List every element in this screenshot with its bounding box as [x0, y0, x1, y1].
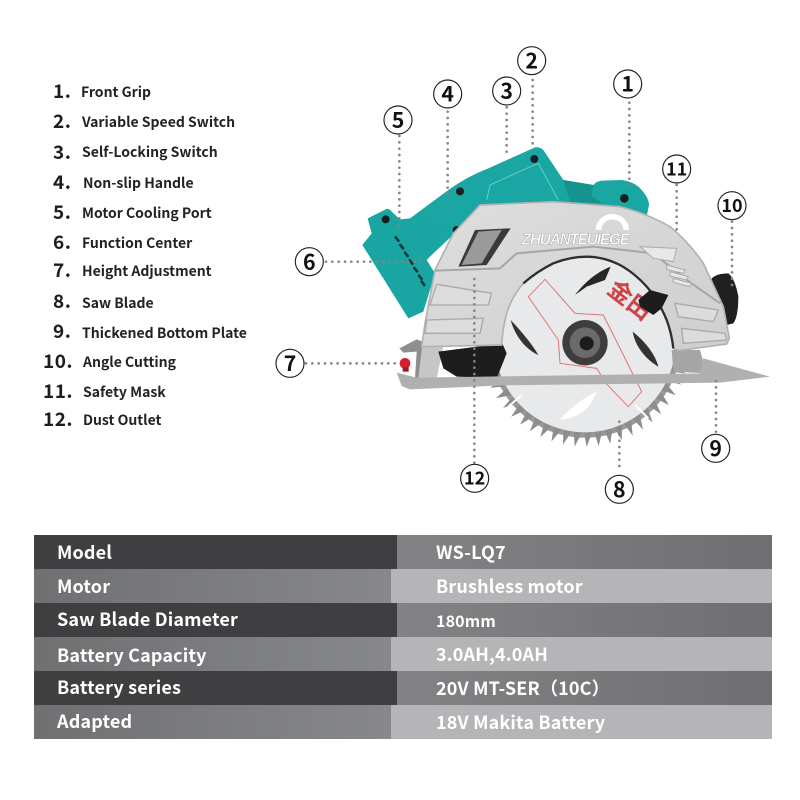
parts legend: Function Center	[82, 233, 192, 253]
row: model: WS-LQ7	[436, 539, 506, 565]
parts legend: 10.	[43, 347, 73, 374]
row: battery capacity: Battery Capacity	[57, 642, 207, 668]
row: battery series: 20V MT-SER（10C）	[436, 675, 610, 701]
parts legend: Variable Speed Switch	[82, 112, 235, 132]
rear bracket and motor	[399, 339, 707, 378]
callout numbers: 4	[441, 78, 454, 109]
circular saw	[362, 147, 770, 447]
parts legend: Self-Locking Switch	[82, 142, 218, 162]
numbered callout badges	[276, 47, 746, 503]
callout numbers: 3	[500, 75, 513, 106]
parts legend: Height Adjustment	[82, 261, 212, 281]
parts legend: 8.	[53, 287, 71, 314]
callout numbers	[284, 44, 743, 504]
callout numbers: 11	[666, 155, 687, 181]
row: adapted	[34, 705, 772, 739]
teal handle and battery mount	[362, 147, 649, 318]
parts legend: Thickened Bottom Plate	[82, 323, 247, 343]
parts legend: Non-slip Handle	[83, 173, 194, 193]
parts legend: 9.	[53, 317, 71, 344]
parts legend: 2.	[53, 107, 71, 134]
parts legend: 5.	[53, 198, 71, 225]
parts legend: Angle Cutting	[83, 352, 176, 372]
callout numbers: 12	[464, 465, 485, 491]
callout numbers: 10	[721, 192, 743, 218]
row: adapted: Adapted	[57, 708, 132, 734]
row: motor	[34, 569, 772, 603]
bottom plate	[397, 358, 770, 389]
vent mark	[640, 247, 692, 287]
parts legend: 11.	[43, 377, 73, 404]
row: saw blade diameter: Saw Blade Diameter	[57, 606, 238, 632]
row: battery series: Battery series	[57, 674, 181, 700]
parts legend: Front Grip	[81, 82, 151, 102]
guard logo: ZHUANTEUIEGE	[521, 231, 631, 248]
callout numbers: 8	[613, 473, 626, 504]
row: battery capacity: 3.0AH,4.0AH	[436, 641, 548, 667]
parts legend	[43, 77, 247, 432]
parts legend: Motor Cooling Port	[82, 203, 212, 223]
parts legend: 3.	[53, 138, 71, 165]
callout numbers: 7	[284, 347, 296, 378]
dust window	[458, 228, 511, 267]
callout numbers: 9	[709, 432, 722, 463]
row: battery capacity	[34, 637, 772, 671]
callout numbers: 2	[525, 44, 538, 75]
callout leader lines	[306, 80, 732, 466]
parts legend: Saw Blade	[82, 293, 154, 313]
callout numbers: 1	[621, 68, 634, 99]
row: adapted: 18V Makita Battery	[436, 709, 605, 735]
row: saw blade diameter: 180mm	[436, 608, 496, 632]
row: motor: Motor	[57, 573, 110, 599]
parts legend: 4.	[53, 168, 71, 195]
parts legend: 7.	[53, 256, 71, 283]
specification table	[34, 535, 772, 739]
callout numbers: 5	[392, 104, 404, 135]
parts legend: 1.	[53, 77, 71, 104]
row: model	[34, 535, 772, 569]
row: saw blade diameter	[34, 603, 772, 637]
parts legend: 12.	[43, 405, 73, 432]
parts legend: 6.	[53, 228, 71, 255]
parts legend: Safety Mask	[83, 382, 166, 402]
angle knob	[712, 273, 738, 325]
row: battery series	[34, 671, 772, 705]
safety guard	[422, 202, 729, 351]
row: motor: Brushless motor	[436, 573, 583, 599]
blade brand characters: 金田	[602, 270, 661, 327]
height adjustment red knob	[400, 358, 410, 372]
blade lock clip	[638, 290, 668, 315]
parts legend: Dust Outlet	[83, 410, 161, 430]
row: model: Model	[57, 539, 112, 565]
saw blade	[480, 246, 689, 447]
callout numbers: 6	[303, 245, 316, 276]
